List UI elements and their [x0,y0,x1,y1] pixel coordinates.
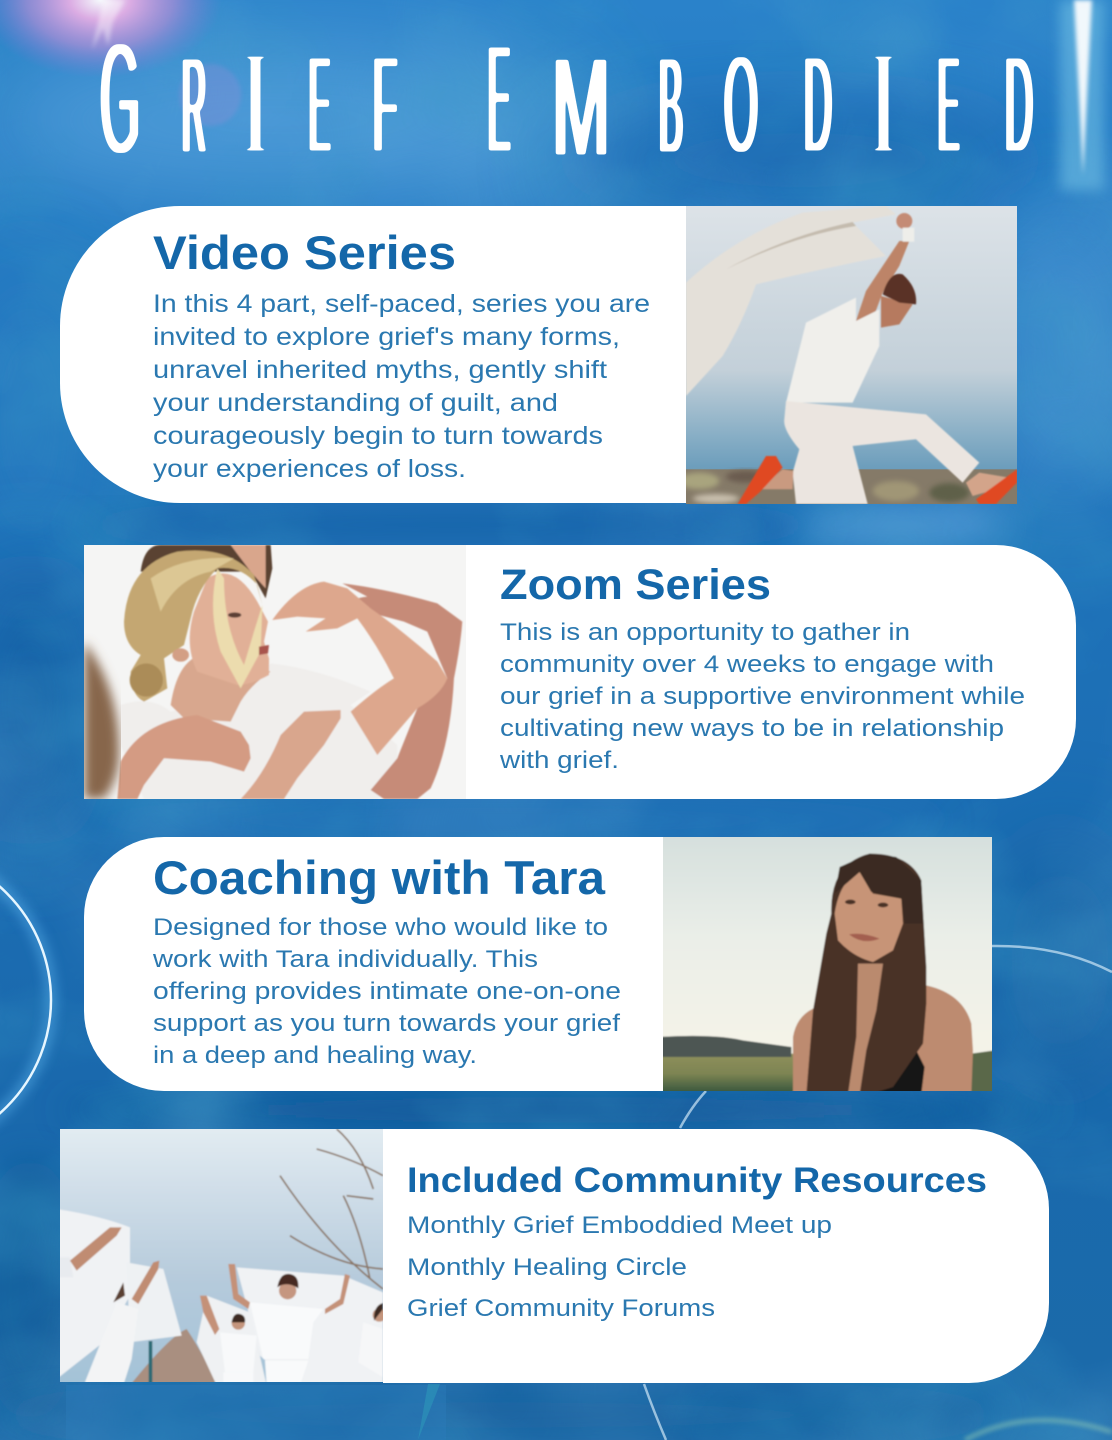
title: D [804,28,832,182]
text: video series description: invited to explore grief's many forms, [153,323,620,351]
text: video series description: In this 4 part, self-paced, series you are [153,290,650,318]
title: E [938,28,959,182]
text: resources list [407,1212,832,1322]
title: M [552,28,610,187]
title: B [659,29,683,183]
title: O [724,28,758,182]
panel: coaching with tara [84,834,995,1094]
text: resources list: Grief Community Forums [407,1295,715,1322]
panel: video series [60,203,1020,507]
text: zoom series description: cultivating new ways to be in relationship [500,715,1004,742]
title: F [373,28,397,182]
text: zoom series description: with grief. [499,747,619,774]
text: coaching description: in a deep and healing way. [153,1042,477,1069]
light beam top right [1060,0,1104,190]
panel: included community resources [57,1126,1049,1385]
photo: group dancing with white cloths [57,1126,386,1385]
text: resources list: Monthly Grief Emboddied Meet up [407,1212,832,1239]
heading: included community resources: Included Community Resources [407,1161,987,1200]
text: video series description [153,290,650,483]
text: video series description: unravel inherited myths, gently shift [153,356,607,384]
photo: woman with blonde hair and raised arm [81,542,469,802]
title: E [488,13,510,185]
heading: coaching with tara: Coaching with Tara [153,851,606,904]
text: D [1005,28,1033,182]
title: R [182,29,206,183]
title: I [245,21,266,185]
title: I [873,21,894,185]
light flare top left [0,0,241,126]
title: E [309,28,330,182]
title: G [100,11,140,187]
text: coaching description: offering provides intimate one-on-one [153,978,621,1005]
text: zoom series description: This is an opportunity to gather in [500,619,910,646]
text: video series description: your understanding of guilt, and [153,389,558,417]
text: resources list: Monthly Healing Circle [407,1254,687,1281]
glowing ring left [0,849,51,1151]
text: video series description: your experiences of loss. [153,455,466,483]
photo: portrait of Tara [660,834,995,1094]
text: coaching description [152,914,621,1069]
text: video series description: courageously begin to turn towards [153,422,603,450]
photo: dancer with white cloth [679,203,1020,507]
text: zoom series description [499,619,1025,774]
text: coaching description: support as you turn towards your grief [153,1010,620,1037]
panel: zoom series [81,542,1076,802]
text: zoom series description: community over 4 weeks to engage with [500,651,994,678]
text: coaching description: Designed for those who would like to [153,914,608,941]
thin arcs [418,946,1112,1440]
text: coaching description: work with Tara individually. This [152,946,538,973]
text: zoom series description: our grief in a supportive environment while [500,683,1025,710]
heading: zoom series: Zoom Series [500,561,771,609]
title [100,11,1033,187]
heading: video series: Video Series [153,226,456,279]
